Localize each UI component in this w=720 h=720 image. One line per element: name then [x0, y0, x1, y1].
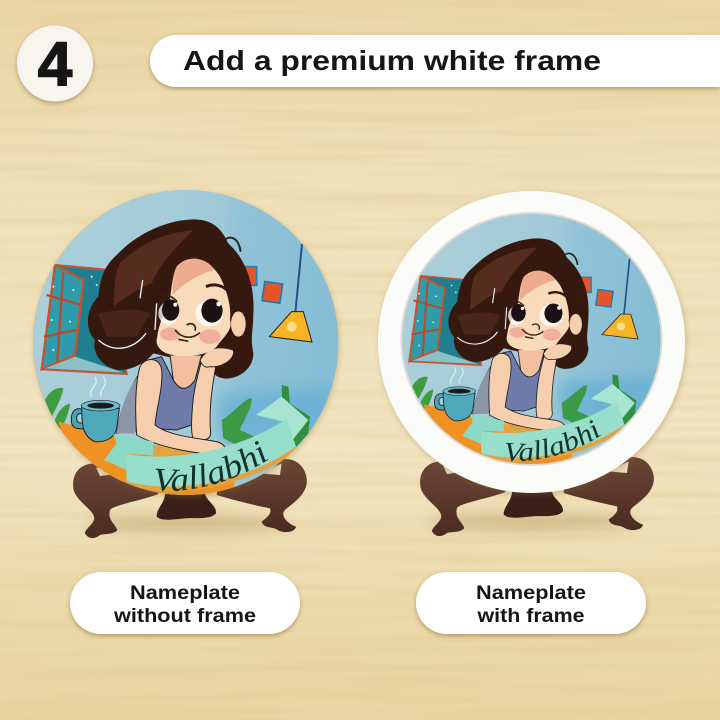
step number badge	[17, 26, 93, 102]
coffee cup	[71, 377, 120, 442]
torso and tank top	[117, 355, 203, 433]
wooden stand	[73, 459, 307, 538]
step number badge: 4	[38, 30, 73, 99]
right nameplate with frame	[376, 190, 689, 536]
label: nameplate without frame	[70, 572, 300, 634]
label: nameplate with frame: Nameplate	[476, 583, 586, 604]
label: nameplate with frame: with frame	[476, 606, 584, 627]
label: nameplate without frame: without frame	[113, 606, 256, 627]
name on banner: Vallabhi	[506, 420, 601, 462]
hanging lamp	[269, 244, 312, 342]
arms	[136, 348, 234, 455]
name banner ribbon	[104, 397, 308, 492]
label: nameplate without frame: Nameplate	[130, 583, 240, 604]
title banner: Add a premium white frame	[183, 45, 601, 76]
eyes	[158, 302, 178, 325]
wall art squares	[244, 267, 283, 303]
stand shadow	[85, 516, 285, 532]
wooden stand	[420, 457, 654, 536]
title banner	[150, 35, 720, 87]
name on banner: Vallabhi	[156, 441, 268, 492]
round painted plate	[33, 190, 338, 495]
wall	[30, 187, 343, 500]
face	[157, 259, 246, 356]
window	[42, 265, 127, 374]
table	[58, 422, 237, 503]
brows and mouth	[163, 295, 200, 341]
hair	[88, 219, 254, 379]
left nameplate without frame	[31, 189, 342, 538]
plate artwork	[33, 190, 338, 495]
stand shadow	[427, 514, 637, 530]
white frame	[378, 191, 685, 493]
framed artwork	[402, 214, 660, 464]
plants	[45, 385, 310, 447]
label: nameplate with frame	[416, 572, 646, 634]
